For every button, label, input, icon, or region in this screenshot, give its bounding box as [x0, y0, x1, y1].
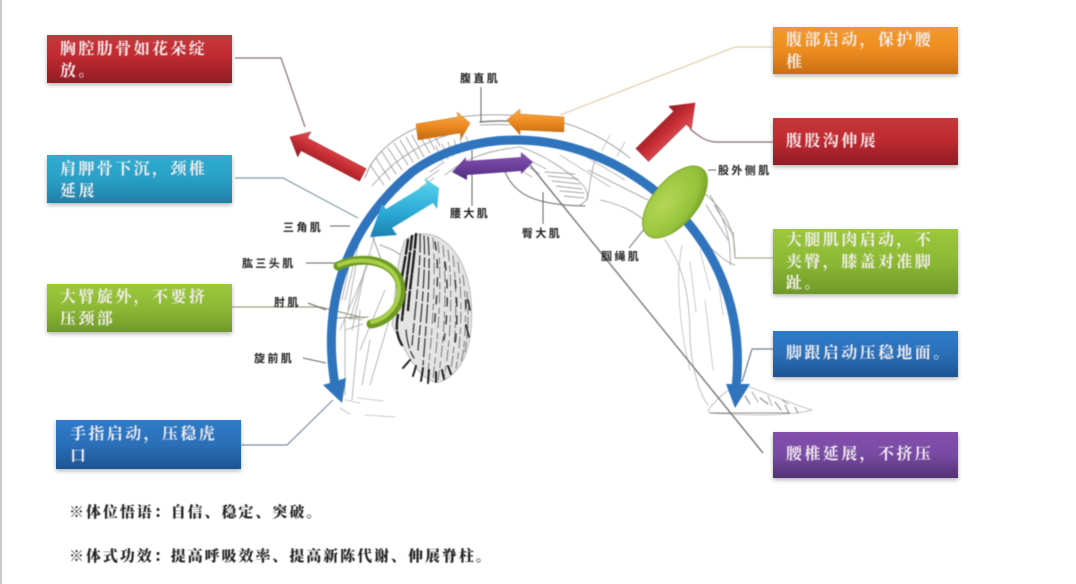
connector: groin	[690, 129, 773, 142]
muscle labels: 腹直肌	[460, 71, 500, 85]
connector: abdomen	[560, 47, 773, 115]
curved green arrow	[338, 260, 401, 324]
arrow: cyan double	[370, 178, 439, 237]
callout: fingers: 手指启动，压稳虎	[70, 426, 217, 443]
muscle labels: 肱三头肌	[242, 256, 296, 270]
callout: heel	[773, 331, 958, 377]
muscle labels: 臀大肌	[522, 226, 562, 240]
muscle labels	[242, 71, 772, 365]
connector: chest	[235, 58, 305, 127]
callout: chest	[47, 35, 232, 83]
muscle labels: 股外侧肌	[718, 163, 772, 177]
callout: chest: 胸腔肋骨如花朵绽	[60, 41, 207, 58]
big blue arc arrow	[323, 140, 750, 408]
callout: shoulder: 肩胛骨下沉，颈椎	[60, 161, 207, 178]
arrow: orange right	[507, 109, 564, 135]
callout: shoulder: 延展	[60, 182, 97, 200]
callout: groin	[773, 118, 958, 165]
callout: upper arm	[47, 284, 232, 332]
callout: shoulder	[47, 155, 232, 203]
torso outline	[365, 115, 655, 230]
body sketch	[335, 115, 812, 417]
callout: fingers	[56, 420, 241, 469]
arrow: purple double	[452, 152, 533, 180]
connector: thigh	[733, 232, 773, 258]
callout: abdomen: 腹部启动，保护腰	[786, 32, 933, 49]
connector: fingers	[241, 400, 333, 445]
callout: thigh	[773, 229, 958, 294]
callout: upper arm: 压颈部	[60, 310, 115, 328]
muscle labels: 肘肌	[274, 295, 301, 309]
connector lines	[232, 47, 773, 453]
muscle labels: 腘绳肌	[601, 249, 641, 263]
callout: lumbar: 腰椎延展，不挤压	[786, 446, 933, 463]
callout: fingers: 口	[70, 448, 88, 464]
muscle labels: 三角肌	[283, 220, 323, 234]
note: pose benefits: ※体式功效：提高呼吸效率、提高新陈代谢、伸展脊柱。	[69, 549, 493, 565]
callout: thigh: 趾。	[786, 275, 823, 292]
muscle labels: 旋前肌	[254, 351, 294, 365]
callout: abdomen	[773, 27, 958, 74]
callout: lumbar	[773, 432, 958, 478]
callout: abdomen: 椎	[786, 54, 804, 70]
callout: thigh: 夹臀，膝盖对准脚	[786, 254, 933, 270]
connector: lumbar	[530, 165, 763, 453]
muscle leader lines	[303, 87, 716, 363]
callout: chest: 放。	[60, 62, 97, 80]
callout: groin: 腹股沟伸展	[786, 133, 878, 150]
callout: thigh: 大腿肌肉启动，不	[786, 232, 933, 249]
arrow: orange left	[416, 112, 470, 140]
green thigh ellipse	[631, 155, 719, 249]
arrow: groin red	[631, 92, 706, 166]
arm sketch	[335, 235, 412, 417]
callout: heel: 脚跟启动压稳地面。	[786, 345, 952, 362]
connector: heel	[742, 349, 773, 382]
muscle labels: 腰大肌	[450, 206, 490, 220]
arrow: chest red	[284, 125, 369, 187]
hair	[392, 234, 472, 383]
connector: upper arm	[232, 307, 364, 318]
leg sketch	[665, 190, 812, 415]
connector: shoulder	[235, 178, 358, 218]
note: pose insight: ※体位悟语：自信、稳定、突破。	[69, 505, 323, 521]
callout: upper arm: 大臂旋外，不要挤	[60, 289, 207, 306]
